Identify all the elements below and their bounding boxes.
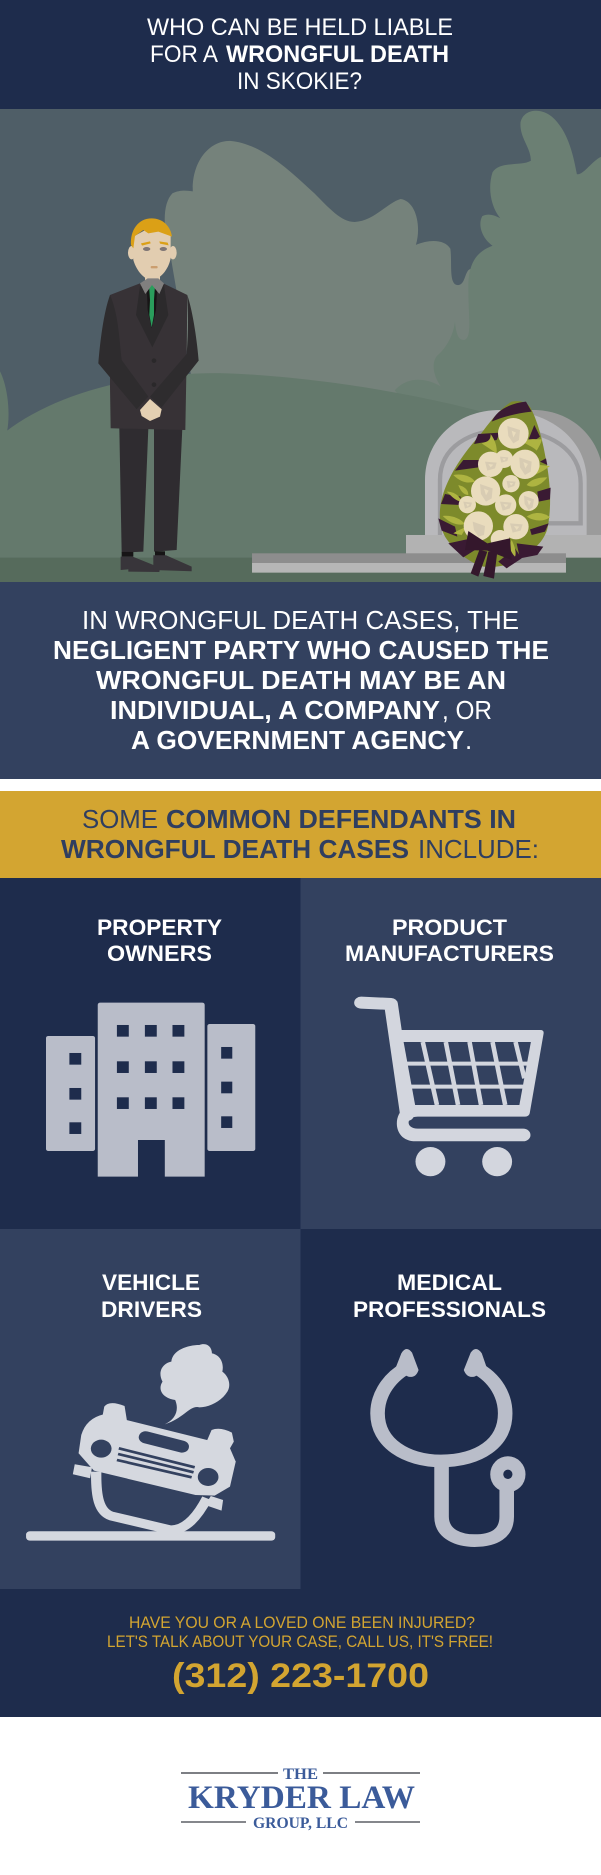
background bush: right xyxy=(395,111,601,459)
panel: vehicle drivers xyxy=(0,1229,300,1589)
panel: product manufacturers xyxy=(300,878,601,1229)
ground xyxy=(0,558,601,584)
panel: medical professionals xyxy=(300,1229,601,1589)
footer call to action: HAVE YOU OR A LOVED ONE BEEN INJURED? xyxy=(129,1613,475,1632)
header: title xyxy=(0,0,601,109)
header: title: IN SKOKIE? xyxy=(237,68,362,95)
logo: The Kryder Law Group xyxy=(181,1766,420,1832)
gold banner heading: WRONGFUL DEATH CASES xyxy=(61,834,409,864)
panel: medical professionals: MEDICAL xyxy=(397,1270,502,1295)
gold banner heading: COMMON DEFENDANTS IN xyxy=(166,804,516,834)
panel: property owners xyxy=(0,878,300,1229)
intro statement band: WRONGFUL DEATH MAY BE AN xyxy=(96,665,506,695)
icon: stethoscope xyxy=(378,1349,526,1541)
header: title: WRONGFUL DEATH xyxy=(226,41,449,68)
logo: The Kryder Law Group: GROUP, LLC xyxy=(253,1815,348,1832)
icon: office buildings xyxy=(46,1003,255,1177)
intro statement band: IN WRONGFUL DEATH CASES, THE xyxy=(82,605,519,635)
intro statement band: A GOVERNMENT AGENCY xyxy=(131,725,464,755)
icon: overturned car with smoke xyxy=(26,1344,275,1541)
footer call to action: LET'S TALK ABOUT YOUR CASE, CALL US, IT'S FREE! xyxy=(107,1632,493,1651)
gold banner heading xyxy=(0,791,601,878)
gold banner heading: SOME xyxy=(82,804,158,834)
gold banner heading: INCLUDE: xyxy=(418,834,539,864)
panel: vehicle drivers: VEHICLE xyxy=(102,1270,200,1295)
illustration: cemetery scene xyxy=(0,109,601,584)
phone number: (312) 223-1700 xyxy=(172,1657,429,1695)
panel: property owners: OWNERS xyxy=(107,941,212,966)
intro statement band: , OR xyxy=(442,695,492,725)
background bush: centre xyxy=(165,141,471,394)
wreath ribbon bow xyxy=(465,531,512,579)
panel: medical professionals: PROFESSIONALS xyxy=(353,1297,546,1322)
header: title: FOR A xyxy=(150,41,218,68)
intro statement band xyxy=(0,582,601,779)
header: title: WHO CAN BE HELD LIABLE xyxy=(147,14,453,41)
footer call to action xyxy=(0,1589,601,1717)
wreath xyxy=(438,401,551,579)
panel: product manufacturers: PRODUCT xyxy=(392,915,508,940)
intro statement band: NEGLIGENT PARTY WHO CAUSED THE xyxy=(53,635,549,665)
panel: product manufacturers: MANUFACTURERS xyxy=(345,941,554,966)
intro statement band: INDIVIDUAL, A COMPANY xyxy=(110,695,440,725)
panel: vehicle drivers: DRIVERS xyxy=(101,1297,202,1322)
logo: The Kryder Law Group: KRYDER LAW xyxy=(188,1780,415,1816)
gravestone xyxy=(252,410,601,573)
logo: The Kryder Law Group: THE xyxy=(283,1766,318,1783)
panel: property owners: PROPERTY xyxy=(97,915,222,940)
icon: shopping cart xyxy=(361,1003,544,1176)
intro statement band: . xyxy=(465,725,472,755)
man in black suit xyxy=(98,218,199,572)
hill and left bush xyxy=(0,371,601,559)
